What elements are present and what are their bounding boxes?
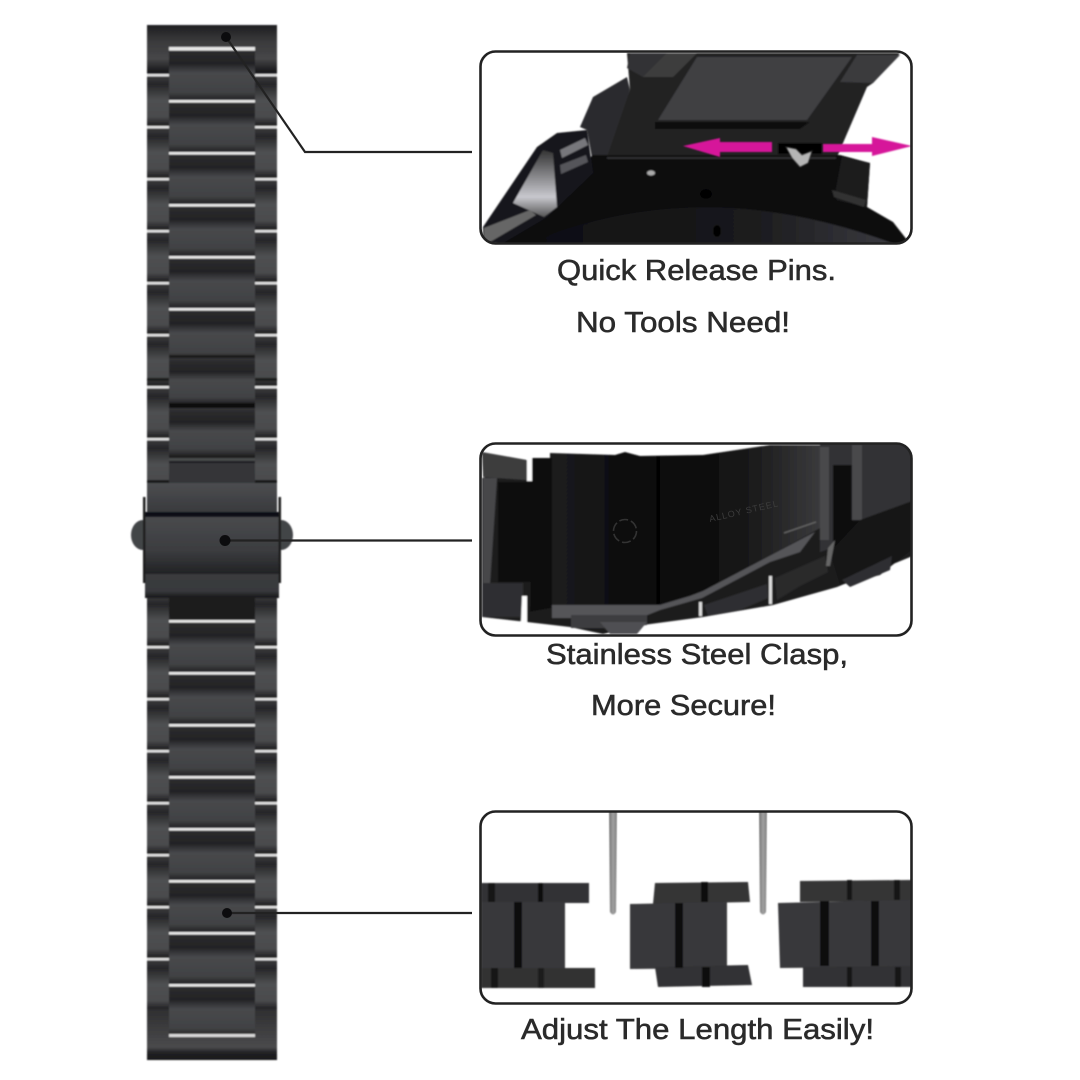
watch band — [131, 25, 293, 1060]
leader: quick release pins — [221, 32, 472, 152]
icon: magenta arrow right — [823, 137, 912, 156]
icon: spring pin left — [609, 811, 617, 914]
leader: clasp — [220, 535, 472, 546]
leader: adjustable links — [222, 908, 472, 918]
photo: clasp underside — [482, 443, 915, 634]
caption: quick release pins: Quick Release Pins. — [557, 255, 836, 287]
engraving: steel marking: ALLOY STEEL — [708, 498, 779, 524]
upper side links — [147, 25, 277, 483]
panel: quick release pins — [480, 52, 912, 245]
lower side links — [147, 598, 277, 1060]
leader lines — [220, 32, 472, 918]
caption: quick release pins — [557, 255, 836, 339]
link section left — [481, 883, 595, 988]
icon: magenta arrow left — [683, 138, 772, 157]
caption: stainless steel clasp: More Secure! — [591, 690, 776, 722]
link section middle — [630, 882, 752, 987]
panel: adjustable links — [480, 811, 912, 1004]
caption: adjustable links: Adjust The Length Easily! — [521, 1014, 874, 1046]
link section right — [778, 880, 912, 987]
top end link — [147, 25, 277, 73]
upper centre links — [169, 48, 255, 485]
panel: stainless steel clasp — [480, 443, 915, 636]
lower centre links — [169, 598, 255, 1040]
photo: watch lug and strap — [483, 53, 911, 245]
bottom end link — [147, 1009, 277, 1060]
caption: stainless steel clasp: Stainless Steel Clasp, — [546, 639, 848, 671]
clasp — [131, 483, 293, 598]
caption: stainless steel clasp — [546, 639, 848, 722]
icon: spring pin right — [759, 811, 767, 914]
caption: quick release pins: No Tools Need! — [576, 307, 790, 339]
engraving: logo circle — [614, 520, 636, 542]
icon: release pin — [786, 147, 812, 167]
